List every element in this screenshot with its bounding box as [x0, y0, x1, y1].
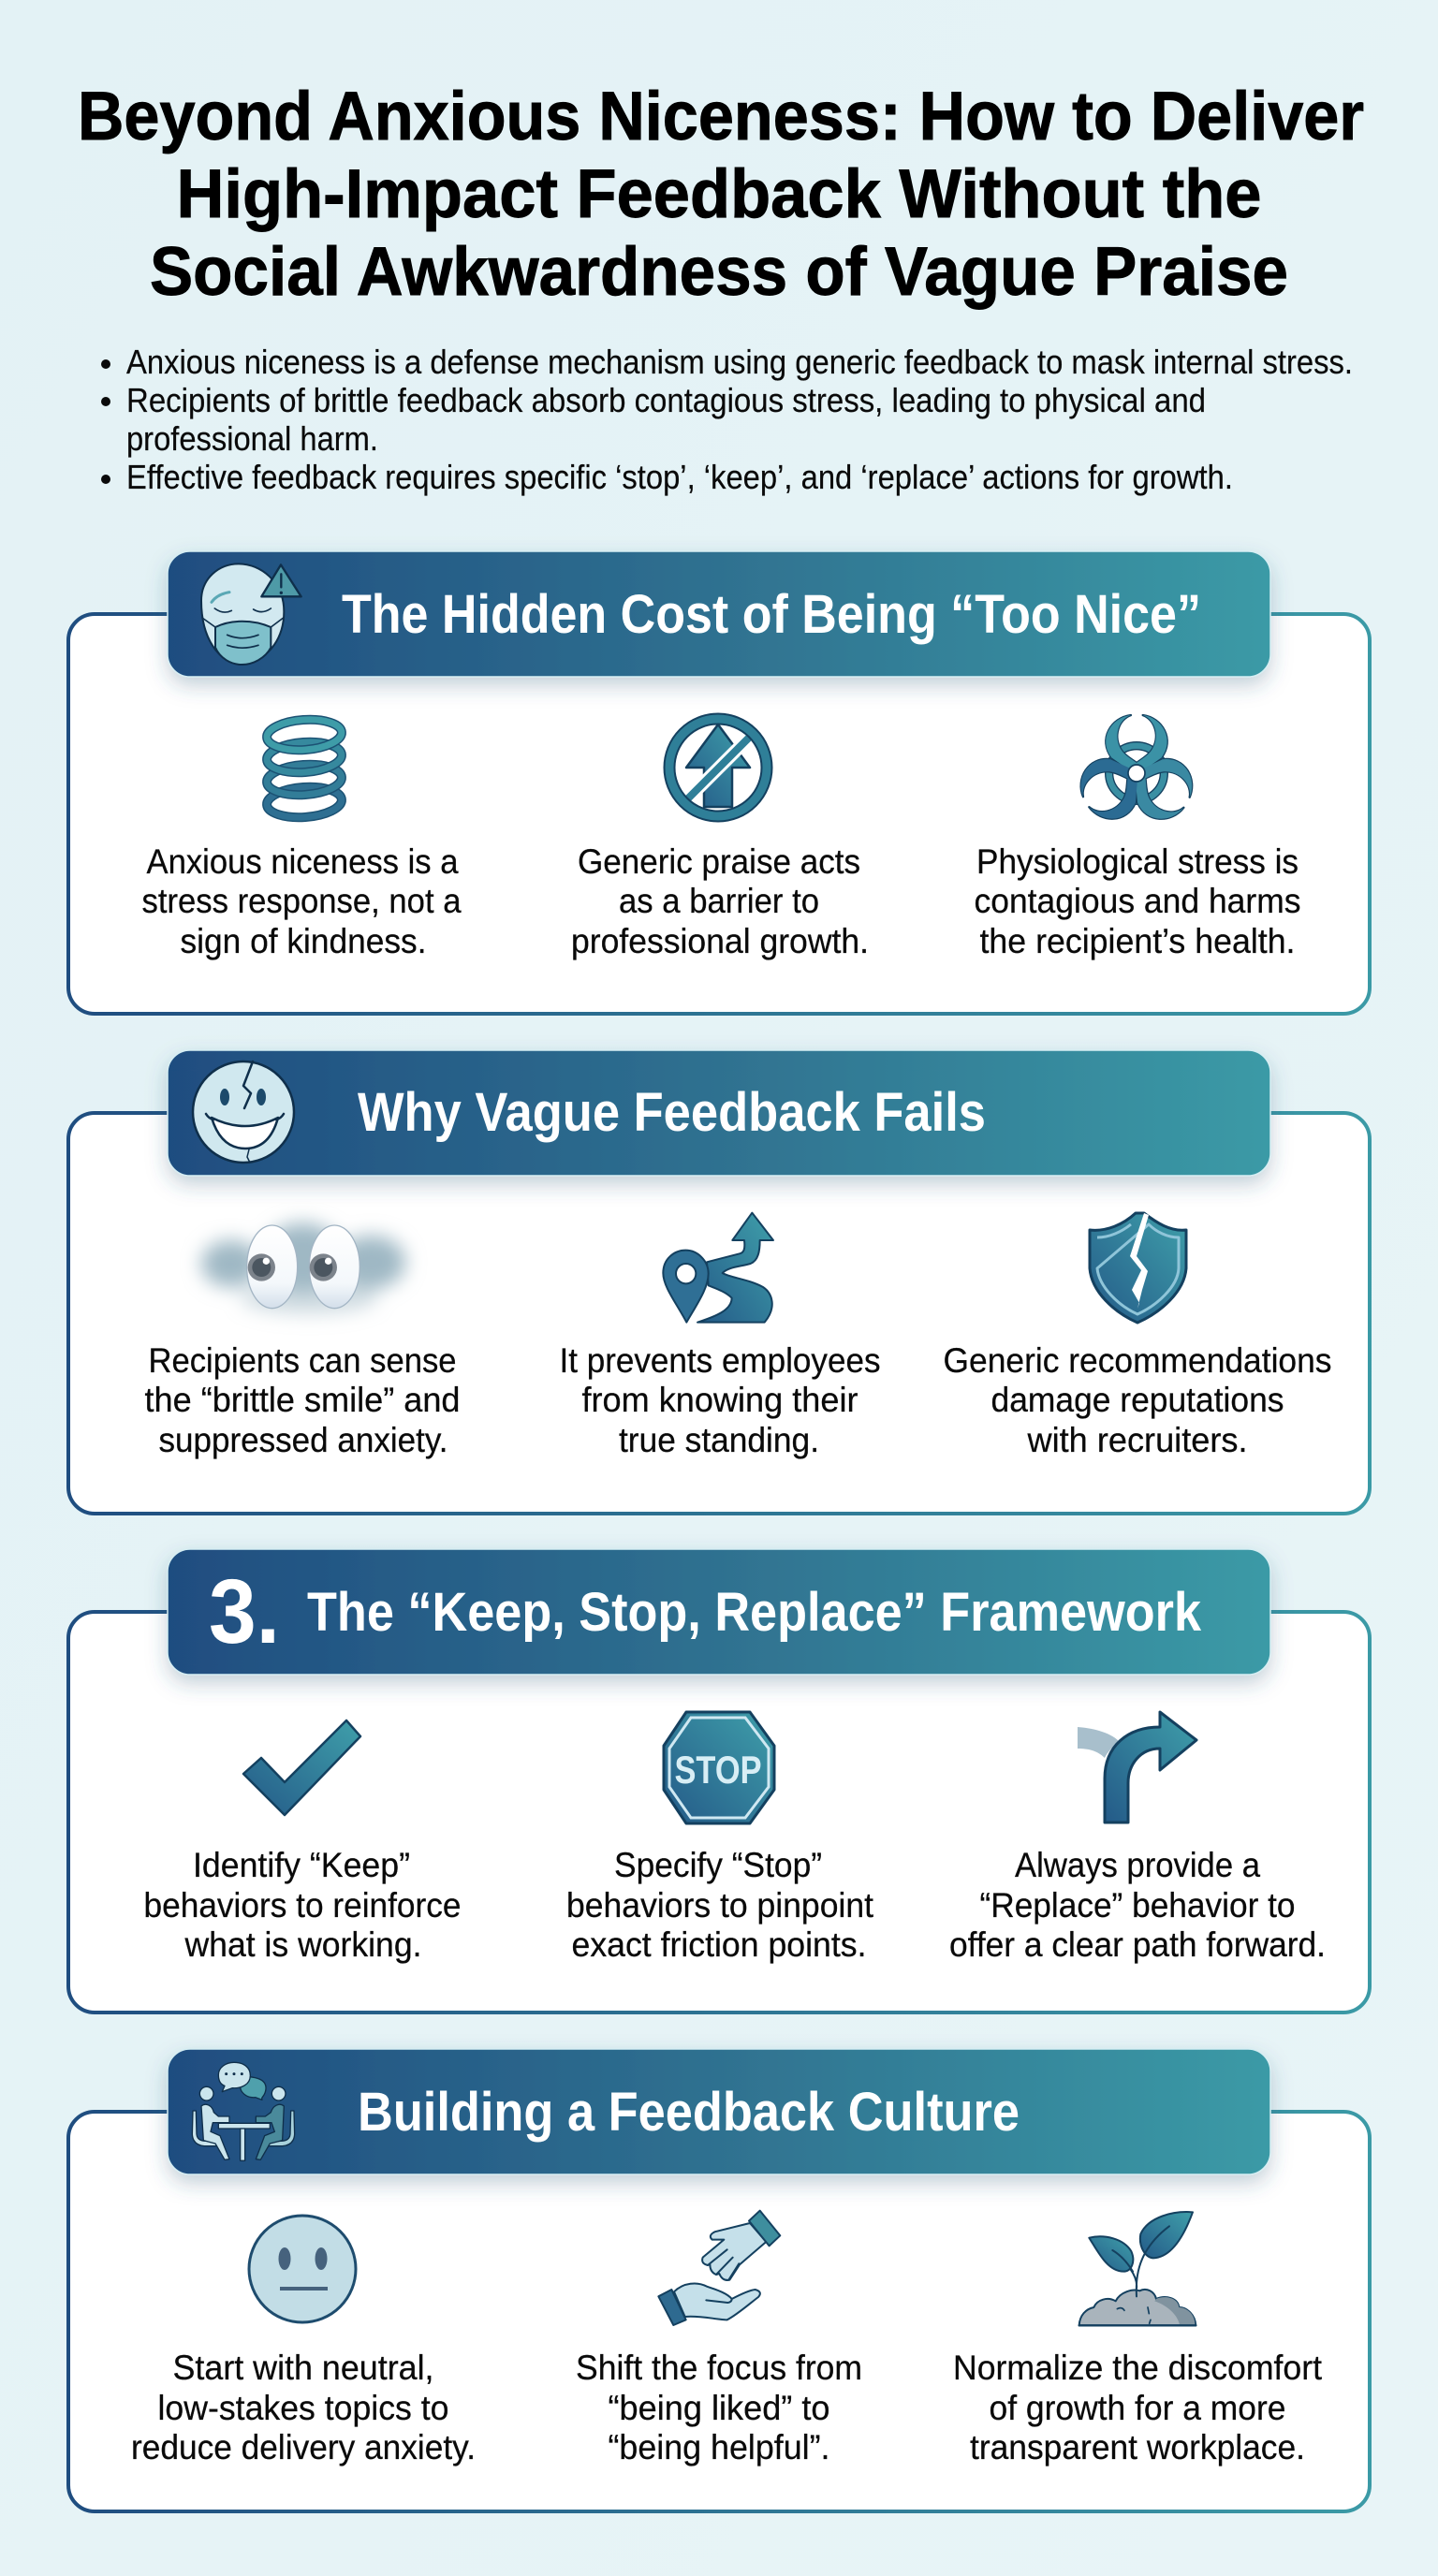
title: High-Impact Feedback Without the	[176, 156, 1262, 232]
text: true standing: It prevents employees	[560, 1340, 880, 1380]
text: neutral topics: reduce delivery anxiety.	[131, 2427, 476, 2466]
text: generic recommendations: damage reputations	[990, 1380, 1284, 1419]
text: brittle smile	[144, 1340, 461, 1459]
card outline	[68, 1612, 1370, 2012]
text: shift the focus: “being liked” to	[609, 2388, 829, 2427]
text: replace	[949, 1845, 1326, 1964]
summary bullet list: Effective feedback requires specific ‘stop’, ‘keep’, and ‘replace’ actions for growth.	[126, 458, 1233, 496]
text: keep: behaviors to reinforce	[144, 1885, 461, 1925]
banner	[168, 551, 1270, 677]
text: generic praise	[571, 842, 869, 960]
icon: stop sign: STOP	[674, 1748, 762, 1792]
summary bullet list: professional harm.	[126, 419, 378, 458]
text: brittle smile: suppressed anxiety.	[159, 1420, 448, 1459]
text: physiological stress: Physiological stress is	[976, 842, 1299, 881]
text: anxious niceness	[142, 842, 462, 960]
icon: neutral face	[249, 2216, 356, 2322]
text: brittle smile: the “brittle smile” and	[144, 1380, 461, 1419]
text: neutral topics: Start with neutral,	[172, 2348, 434, 2387]
text: true standing: true standing.	[619, 1420, 819, 1459]
text: stop: exact friction points.	[571, 1925, 867, 1964]
icon: cracked smiley	[193, 1061, 294, 1163]
icon: giving and receiving hands	[658, 2211, 780, 2325]
icon: masked face with warning	[201, 564, 301, 665]
text: generic praise: Generic praise acts	[578, 842, 860, 881]
banner heading: The “Keep, Stop, Replace” Framework	[307, 1582, 1202, 1643]
icon: coiled spring	[266, 717, 343, 820]
text: neutral topics	[131, 2348, 476, 2466]
text: replace: Always provide a	[1015, 1845, 1260, 1884]
text: shift the focus	[576, 2348, 862, 2466]
text: shift the focus: Shift the focus from	[576, 2348, 862, 2387]
text: shift the focus: “being helpful”.	[609, 2427, 829, 2466]
text: keep: Identify “Keep”	[193, 1845, 410, 1884]
text: normalize discomfort	[953, 2348, 1323, 2466]
panel: keep stop replace framework	[68, 1549, 1370, 2012]
banner	[168, 1050, 1270, 1176]
text: generic praise: professional growth.	[571, 921, 869, 960]
banner heading: Building a Feedback Culture	[358, 2082, 1020, 2143]
panel: the hidden cost of being too nice	[68, 551, 1370, 1014]
banner heading: Why Vague Feedback Fails	[358, 1082, 986, 1143]
card outline	[68, 614, 1370, 1014]
banner heading: The Hidden Cost of Being “Too Nice”	[342, 584, 1201, 645]
icon: replace turn arrow	[1078, 1712, 1196, 1822]
text: replace: offer a clear path forward.	[949, 1925, 1326, 1964]
card outline	[68, 2112, 1370, 2511]
text: keep: what is working.	[184, 1925, 421, 1964]
text: true standing	[560, 1340, 880, 1459]
banner	[168, 2049, 1270, 2174]
icon: growth arrow blocked	[669, 719, 767, 816]
text: generic recommendations: Generic recommendations	[944, 1340, 1331, 1380]
text: physiological stress	[974, 842, 1301, 960]
text: anxious niceness: sign of kindness.	[180, 921, 427, 960]
text: replace: “Replace” behavior to	[979, 1885, 1296, 1925]
text: generic praise: as a barrier to	[619, 881, 819, 920]
icon: stop sign	[664, 1712, 774, 1823]
icon: sprout in soil	[1079, 2212, 1196, 2325]
icon: eyes in anxious fog	[201, 1223, 405, 1313]
card outline	[68, 1113, 1370, 1514]
title: Social Awkwardness of Vague Praise	[150, 234, 1288, 310]
title	[78, 79, 1364, 310]
text: stop	[566, 1845, 874, 1964]
text: stop: Specify “Stop”	[614, 1845, 822, 1884]
text: physiological stress: the recipient’s health.	[979, 921, 1296, 960]
text: anxious niceness: Anxious niceness is a	[146, 842, 459, 881]
text: anxious niceness: stress response, not a	[142, 881, 462, 920]
text: true standing: from knowing their	[582, 1380, 858, 1419]
section number: 3.	[209, 1560, 280, 1662]
text: generic recommendations: with recruiters.	[1027, 1420, 1247, 1459]
text: generic recommendations	[944, 1340, 1331, 1459]
text: keep	[144, 1845, 461, 1964]
text: brittle smile: Recipients can sense	[148, 1340, 457, 1380]
summary bullet list	[101, 343, 1353, 496]
text: stop: behaviors to pinpoint	[566, 1885, 874, 1925]
text: neutral topics: low-stakes topics to	[157, 2388, 449, 2427]
panel: why vague feedback fails	[68, 1050, 1370, 1514]
text: normalize discomfort: transparent workplace.	[970, 2427, 1305, 2466]
banner	[168, 1549, 1270, 1675]
text: physiological stress: contagious and harms	[974, 881, 1301, 920]
title: Beyond Anxious Niceness: How to Deliver	[78, 79, 1364, 154]
icon: cracked shield	[1090, 1213, 1186, 1323]
text: normalize discomfort: of growth for a more	[989, 2388, 1286, 2427]
text: normalize discomfort: Normalize the discomfort	[953, 2348, 1323, 2387]
panel: building a feedback culture	[68, 2049, 1370, 2511]
icon: map pin and winding road	[663, 1213, 773, 1323]
icon: two people talking at a table	[192, 2062, 295, 2160]
summary bullet list: Recipients of brittle feedback absorb contagious stress, leading to physical and	[126, 381, 1206, 419]
icon: check mark	[243, 1720, 360, 1815]
icon: biohazard	[1071, 715, 1202, 828]
